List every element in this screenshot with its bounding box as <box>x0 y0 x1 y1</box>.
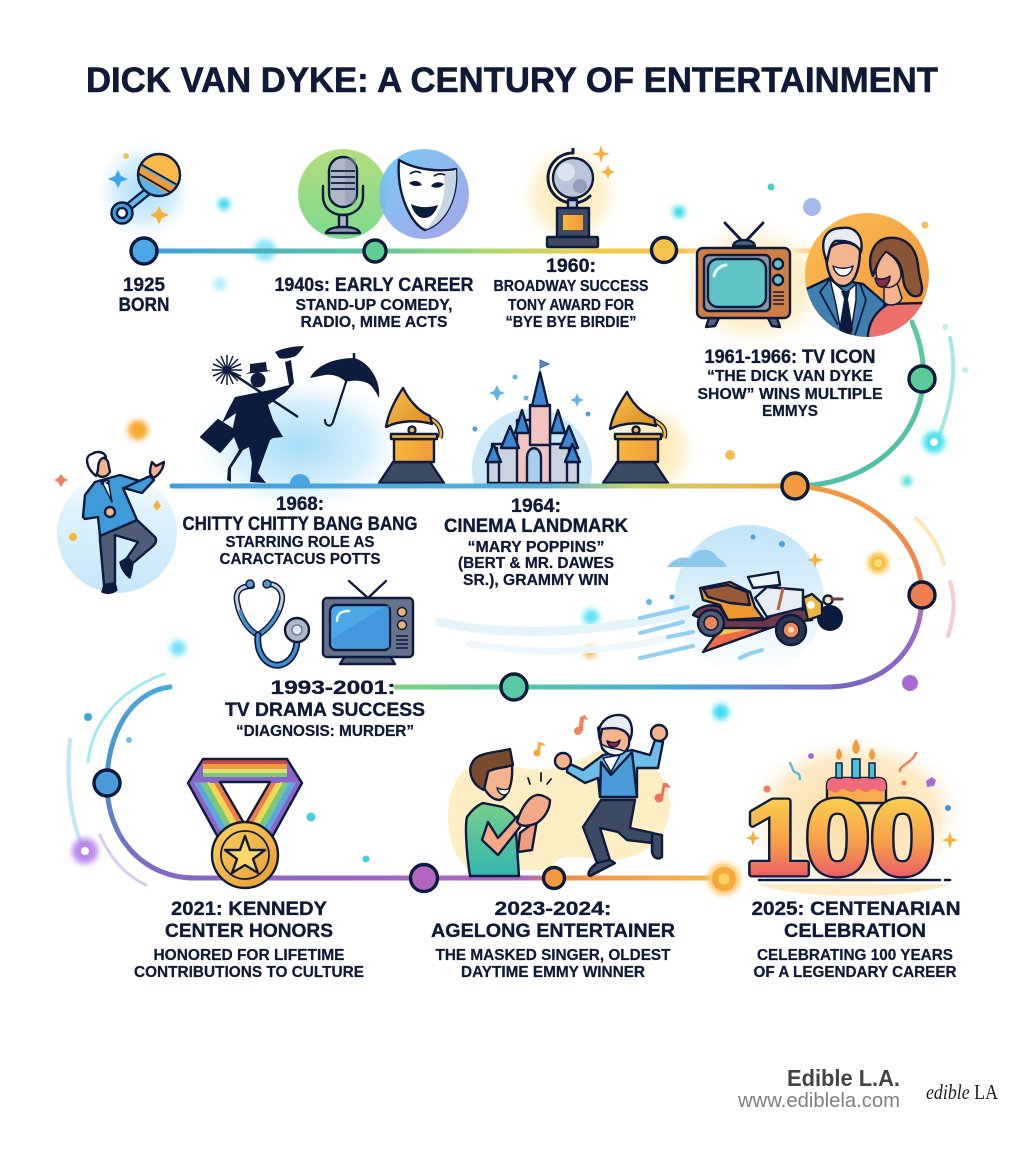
icon: Mary Poppins chimney sweep silhouette and umbrella <box>185 346 415 517</box>
label: 2021 Kennedy Center Honors: HONORED FOR LIFETIME <box>154 947 344 964</box>
label: 2021 Kennedy Center Honors: CENTER HONORS <box>165 921 333 942</box>
bottom timeline segment <box>190 876 724 880</box>
label: 1940s early career: RADIO, MIME ACTS <box>300 314 448 331</box>
label: 1961-1966 TV icon: 1961-1966: TV ICON <box>704 347 876 368</box>
title: DICK VAN DYKE: A CENTURY OF ENTERTAINMENT <box>86 61 938 100</box>
label: 1964 cinema landmark <box>444 496 628 589</box>
label: 1961-1966 TV icon <box>698 347 882 420</box>
icon: fairy-tale castle <box>472 360 592 484</box>
footer credit: edible LA <box>926 1080 999 1104</box>
icon: 100 birthday cake <box>740 733 970 897</box>
label: 1961-1966 TV icon: “THE DICK VAN DYKE <box>707 368 873 385</box>
icon: Kennedy Center medal <box>188 759 302 888</box>
label: 1993-2001 TV drama success: TV DRAMA SUCCESS <box>225 700 425 721</box>
icon: 100 birthday cake: 100 <box>745 778 935 897</box>
label: 1968 Chitty Chitty Bang Bang: 1968: <box>276 494 324 515</box>
label: 2025 centenarian celebration: CELEBRATING 100 YEARS <box>757 947 953 964</box>
footer credit: Edible L.A. <box>787 1065 900 1091</box>
label: 2025 centenarian celebration <box>752 899 960 981</box>
icon: gramophone <box>379 388 444 483</box>
icon: stethoscope <box>237 580 309 665</box>
label: 2021 Kennedy Center Honors: 2021: KENNEDY <box>171 899 327 920</box>
label: 1961-1966 TV icon: SHOW” WINS MULTIPLE <box>698 386 882 403</box>
footer credit <box>737 1065 999 1112</box>
label: 1960 Broadway success <box>494 256 648 331</box>
label: 2025 centenarian celebration: OF A LEGENDARY CAREER <box>754 964 956 981</box>
icon: clapping man and jumping senior <box>448 715 671 876</box>
icon: baby rattle <box>102 148 188 232</box>
label: 1940s early career: STAND-UP COMEDY, <box>296 297 452 314</box>
icon: retro television <box>670 215 840 355</box>
label: 1925 born: 1925 <box>123 275 165 296</box>
label: 2021 Kennedy Center Honors <box>134 899 364 981</box>
label: 2023-2024 ageless entertainer: AGELONG ENTERTAINER <box>431 921 675 942</box>
label: 1964 cinema landmark: SR.), GRAMMY WIN <box>463 572 609 589</box>
label: 1968 Chitty Chitty Bang Bang: CARACTACUS POTTS <box>220 551 380 568</box>
label: 1968 Chitty Chitty Bang Bang <box>182 494 418 568</box>
label: 2023-2024 ageless entertainer: THE MASKED SINGER, OLDEST <box>436 947 671 964</box>
label: 1993-2001 TV drama success: 1993-2001: <box>270 678 396 699</box>
label: 2023-2024 ageless entertainer: 2023-2024: <box>494 899 612 920</box>
label: 1968 Chitty Chitty Bang Bang: STARRING ROLE AS <box>226 534 374 551</box>
label: 1993-2001 TV drama success: “DIAGNOSIS: MURDER” <box>236 723 414 740</box>
label: 2025 centenarian celebration: 2025: CENTENARIAN <box>752 899 960 920</box>
label: 2023-2024 ageless entertainer: DAYTIME EMMY WINNER <box>461 964 645 981</box>
icon: 100 birthday cake: 100 <box>745 778 935 897</box>
label: 1925 born <box>118 275 170 316</box>
label: 1940s early career <box>274 275 474 331</box>
label: 1964 cinema landmark: CINEMA LANDMARK <box>444 516 628 537</box>
icon: dancer in blue jacket <box>54 452 177 593</box>
label: 1960 Broadway success: BROADWAY SUCCESS <box>494 278 648 295</box>
icon: blue screen television <box>323 581 413 664</box>
label: 1925 born: BORN <box>118 295 170 316</box>
icon: microphone and comedy mask <box>298 149 469 239</box>
icon: second gramophone <box>598 392 702 502</box>
label: 1964 cinema landmark: 1964: <box>511 496 561 517</box>
decorative glows and sparkle dots <box>69 184 968 885</box>
label: 1960 Broadway success: TONY AWARD FOR <box>508 297 634 314</box>
label: 2023-2024 ageless entertainer <box>431 899 675 981</box>
label: 2025 centenarian celebration: CELEBRATION <box>784 921 926 942</box>
timeline nodes <box>94 238 935 895</box>
label: 1964 cinema landmark: “MARY POPPINS” <box>468 539 604 556</box>
label: 1993-2001 TV drama success <box>225 678 425 740</box>
label: 1968 Chitty Chitty Bang Bang: CHITTY CHITTY BANG BANG <box>182 514 418 535</box>
label: 1940s early career: 1940s: EARLY CAREER <box>274 275 474 296</box>
icon: portrait of TV couple <box>805 213 929 337</box>
label: 1960 Broadway success: 1960: <box>546 256 596 277</box>
icon: Tony award <box>515 137 625 253</box>
label: 1960 Broadway success: “BYE BYE BIRDIE” <box>506 314 636 331</box>
icon: flying car <box>640 525 843 675</box>
footer credit: www.ediblela.com <box>737 1090 900 1112</box>
timeline path <box>107 251 924 878</box>
label: 1961-1966 TV icon: EMMYS <box>762 403 818 420</box>
middle timeline segment <box>172 484 795 488</box>
label: 2021 Kennedy Center Honors: CONTRIBUTIONS TO CULTURE <box>134 964 364 981</box>
label: 1964 cinema landmark: (BERT & MR. DAWES <box>458 555 614 572</box>
